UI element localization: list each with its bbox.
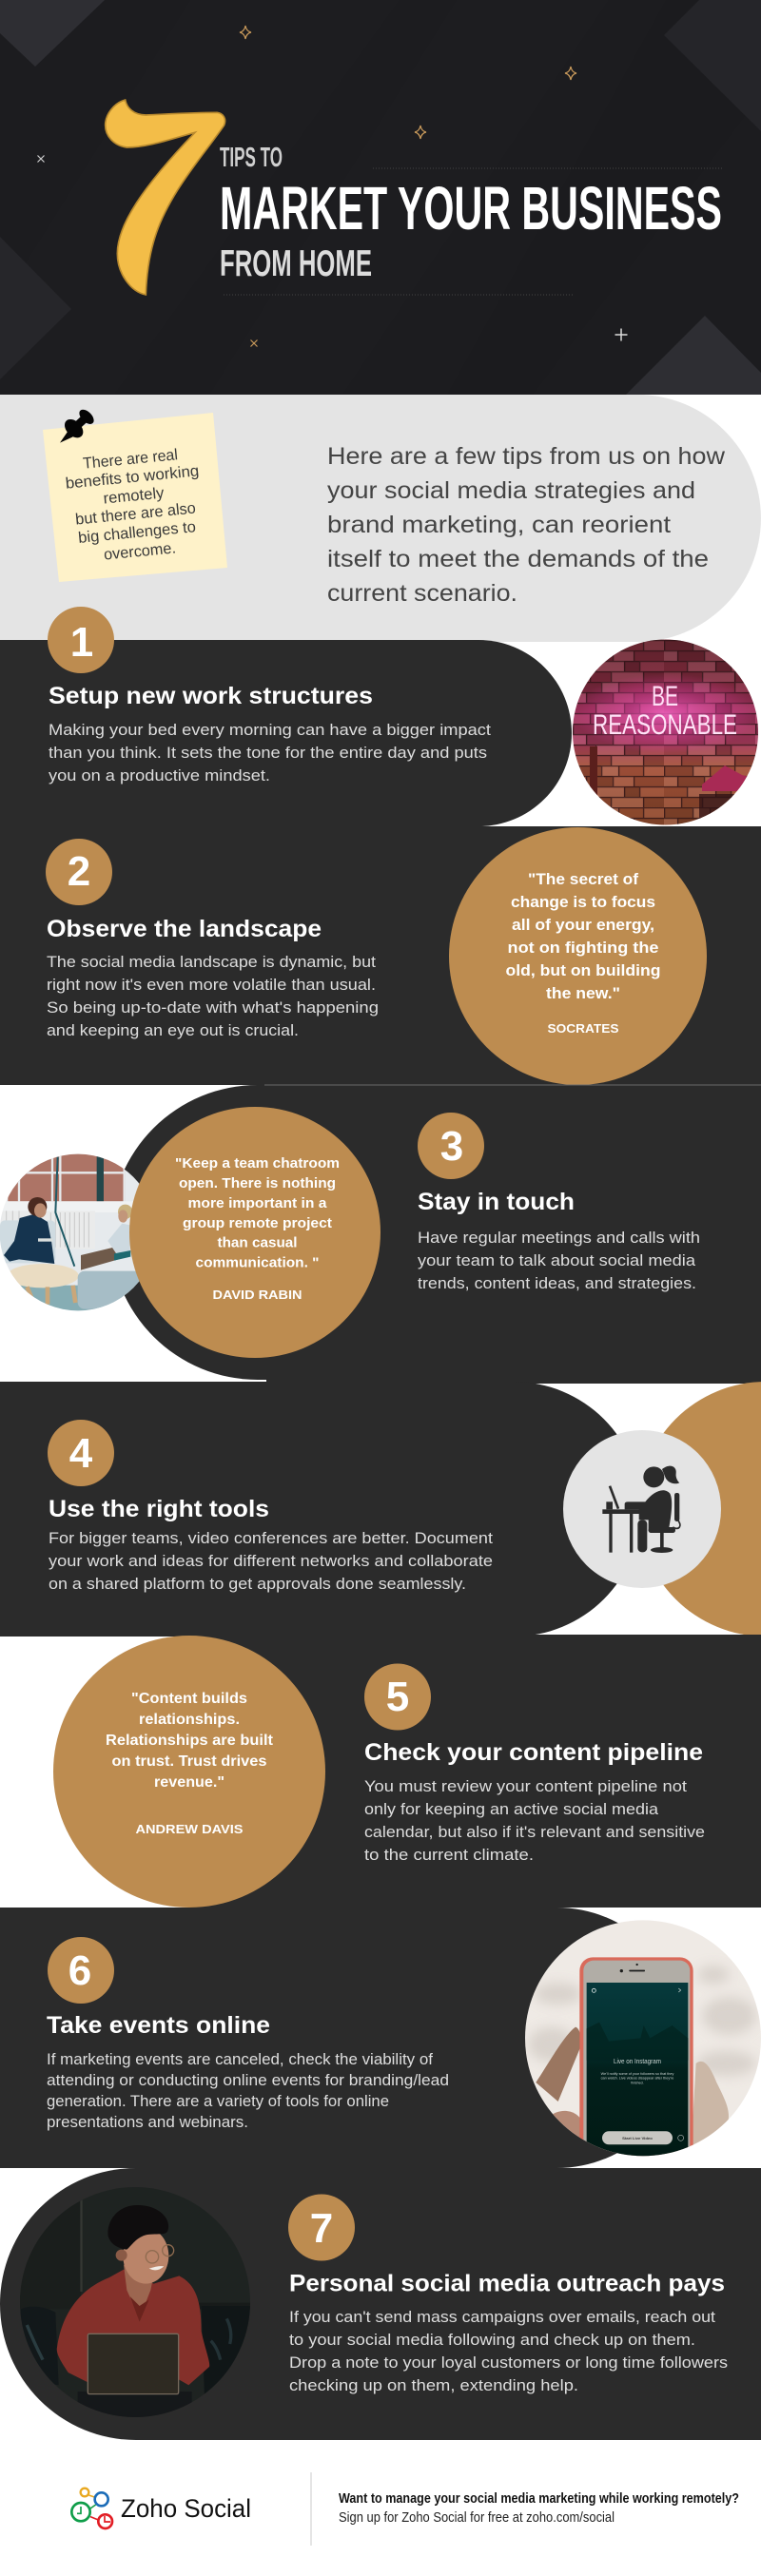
photo: phone with Instagram live screen: can watch. Live videos disappear after they're bbox=[601, 2077, 673, 2081]
intro text: your social media strategies and bbox=[327, 477, 695, 504]
number badge 2: 2 bbox=[68, 848, 90, 895]
logo: Zoho Social bbox=[71, 2489, 251, 2528]
sticky note bbox=[43, 413, 227, 582]
heading: use the right tools: Use the right tools bbox=[49, 1496, 269, 1522]
photo: smiling person with laptop bbox=[14, 2182, 255, 2423]
intro text: current scenario. bbox=[327, 580, 517, 607]
footer bbox=[0, 2440, 761, 2576]
photo: phone with Instagram live screen: finished. bbox=[631, 2082, 644, 2085]
quote circle: Andrew Davis: revenue." bbox=[154, 1774, 224, 1791]
heading: setup new work structures: Setup new work structures bbox=[49, 683, 373, 709]
body text tip 5: to the current climate. bbox=[364, 1847, 534, 1864]
body text tip 4 bbox=[49, 1530, 493, 1593]
intro text: itself to meet the demands of the bbox=[327, 546, 709, 572]
body text tip 2: The social media landscape is dynamic, but bbox=[47, 954, 376, 971]
quote circle: Socrates: change is to focus bbox=[511, 893, 655, 911]
quote circle: David Rabin: than casual bbox=[217, 1234, 297, 1251]
icon: push pin bbox=[60, 407, 96, 443]
quote circle: David Rabin: "Keep a team chatroom bbox=[175, 1155, 340, 1172]
big numeral 7 bbox=[106, 100, 225, 295]
intro text: brand marketing, can reorient bbox=[327, 512, 671, 538]
panel: tip 3 bbox=[0, 1085, 761, 1384]
quote circle: Socrates: SOCRATES bbox=[548, 1021, 619, 1036]
decorative sparkles bbox=[38, 26, 628, 346]
number badge 4: 4 bbox=[69, 1430, 93, 1477]
number badge 3 bbox=[418, 1113, 484, 1179]
quote circle: Andrew Davis: Relationships are built bbox=[106, 1733, 273, 1749]
photo: phone with Instagram live screen: Start Live Video bbox=[622, 2136, 653, 2140]
heading: stay in touch: Stay in touch bbox=[418, 1189, 575, 1215]
icon: person working at desk bbox=[563, 1430, 721, 1588]
photo: phone with Instagram live screen bbox=[523, 1911, 761, 2165]
title: FROM HOME bbox=[220, 243, 372, 284]
quote circle: Socrates: all of your energy, bbox=[512, 916, 654, 934]
number badge 5 bbox=[364, 1664, 431, 1731]
number badge 6 bbox=[48, 1937, 114, 2004]
body text tip 7 bbox=[289, 2309, 728, 2394]
quote circle: David Rabin: open. There is nothing bbox=[179, 1175, 336, 1191]
body text tip 6: attending or conducting online events for branding/lead bbox=[47, 2072, 449, 2089]
body text tip 2: right now it's even more volatile than usual. bbox=[47, 977, 376, 994]
body text tip 5: only for keeping an active social media bbox=[364, 1801, 659, 1818]
photo: team meeting bbox=[0, 1154, 139, 1310]
body text tip 7: Drop a note to your loyal customers or long time followers bbox=[289, 2354, 728, 2372]
sticky note: There are real bbox=[82, 446, 179, 473]
panel: intro bbox=[0, 395, 761, 642]
body text tip 1: than you think. It sets the tone for the entire day and puts bbox=[49, 745, 487, 762]
number badge 5: 5 bbox=[386, 1674, 409, 1720]
sticky note: remotely bbox=[103, 484, 166, 508]
quote circle: Andrew Davis bbox=[53, 1636, 325, 1908]
call to action bbox=[339, 2491, 739, 2526]
body text tip 5 bbox=[364, 1778, 705, 1864]
quote circle: Socrates: not on fighting the bbox=[508, 939, 658, 957]
tan circle accent bbox=[663, 1382, 761, 1635]
panel: tip 2 bbox=[0, 826, 761, 1085]
sticky note: benefits to working bbox=[65, 462, 200, 493]
body text tip 4: on a shared platform to get approvals done seamlessly. bbox=[49, 1576, 466, 1593]
quote circle: Socrates: "The secret of bbox=[528, 870, 638, 888]
body text tip 1: you on a productive mindset. bbox=[49, 767, 270, 784]
panel: tip 6 bbox=[0, 1908, 761, 2168]
heading: personal social media outreach pays: Personal social media outreach pays bbox=[289, 2271, 725, 2297]
body text tip 7: If you can't send mass campaigns over emails, reach out bbox=[289, 2309, 715, 2326]
panel: tip 1 bbox=[0, 607, 761, 827]
body text tip 4: your work and ideas for different networks and collaborate bbox=[49, 1553, 493, 1570]
panel: tip 7 bbox=[0, 2168, 761, 2440]
number badge 1: 1 bbox=[70, 619, 93, 666]
title bbox=[220, 143, 722, 295]
body text tip 3: your team to talk about social media bbox=[418, 1252, 696, 1269]
quote circle: Socrates bbox=[449, 827, 707, 1085]
body text tip 5: calendar, but also if it's relevant and sensitive bbox=[364, 1824, 705, 1841]
heading: observe the landscape: Observe the landscape bbox=[47, 916, 322, 942]
quote circle: Andrew Davis: on trust. Trust drives bbox=[112, 1753, 266, 1770]
intro text bbox=[327, 443, 726, 607]
call to action: Sign up for Zoho Social for free at zoho.com/social bbox=[339, 2510, 615, 2526]
body text tip 7: checking up on them, extending help. bbox=[289, 2377, 578, 2394]
heading: take events online: Take events online bbox=[47, 2012, 270, 2039]
panel: tip 4 bbox=[0, 1382, 761, 1637]
body text tip 4: For bigger teams, video conferences are better. Document bbox=[49, 1530, 493, 1547]
logo: Zoho Social: Zoho Social bbox=[121, 2494, 251, 2523]
header banner bbox=[0, 0, 761, 395]
quote circle: Socrates: the new." bbox=[546, 984, 620, 1002]
body text tip 7: to your social media following and check up on them. bbox=[289, 2332, 695, 2349]
body text tip 6: generation. There are a variety of tools for online bbox=[47, 2093, 389, 2110]
sticky note: overcome. bbox=[103, 539, 177, 564]
body text tip 2: So being up-to-date with what's happening bbox=[47, 999, 379, 1017]
sticky note: but there are also bbox=[74, 499, 197, 529]
quote circle: Andrew Davis: "Content builds bbox=[131, 1691, 247, 1707]
number badge 7 bbox=[288, 2195, 355, 2261]
heading: check your content pipeline: Check your content pipeline bbox=[364, 1739, 703, 1766]
quote circle: Andrew Davis: ANDREW DAVIS bbox=[135, 1822, 244, 1836]
number badge 6: 6 bbox=[68, 1947, 91, 1994]
body text tip 3: Have regular meetings and calls with bbox=[418, 1230, 700, 1247]
photo: neon sign on brick wall bbox=[571, 637, 761, 827]
quote circle: Socrates: old, but on building bbox=[506, 961, 660, 979]
photo: neon sign on brick wall: BE bbox=[652, 681, 678, 712]
body text tip 6: presentations and webinars. bbox=[47, 2114, 248, 2131]
body text tip 1: Making your bed every morning can have a bigger impact bbox=[49, 722, 491, 739]
body text tip 2: and keeping an eye out is crucial. bbox=[47, 1022, 299, 1039]
body text tip 1 bbox=[49, 722, 491, 784]
photo: phone with Instagram live screen: Live on Instagram bbox=[614, 2059, 661, 2065]
number badge 7: 7 bbox=[310, 2205, 333, 2252]
quote circle: David Rabin bbox=[129, 1107, 380, 1358]
body text tip 3 bbox=[418, 1230, 700, 1292]
number badge 3: 3 bbox=[440, 1123, 463, 1170]
number badge 4 bbox=[48, 1420, 114, 1486]
sticky note: big challenges to bbox=[77, 518, 197, 547]
body text tip 6: If marketing events are canceled, check the viability of bbox=[47, 2051, 433, 2068]
quote circle: Andrew Davis: relationships. bbox=[139, 1712, 240, 1728]
body text tip 2 bbox=[47, 954, 379, 1039]
body text tip 6 bbox=[47, 2051, 449, 2131]
number badge 1 bbox=[48, 607, 114, 673]
panel: tip 5 bbox=[53, 1635, 761, 1908]
quote circle: David Rabin: DAVID RABIN bbox=[213, 1288, 302, 1302]
body text tip 3: trends, content ideas, and strategies. bbox=[418, 1275, 696, 1292]
quote circle: David Rabin: group remote project bbox=[183, 1215, 332, 1231]
body text tip 5: You must review your content pipeline not bbox=[364, 1778, 687, 1795]
quote circle: David Rabin: communication. " bbox=[196, 1255, 320, 1270]
photo: phone with Instagram live screen: We'll notify some of your followers so that they bbox=[601, 2072, 674, 2076]
number badge 2 bbox=[46, 839, 112, 905]
title: TIPS TO bbox=[220, 143, 283, 173]
intro text: Here are a few tips from us on how bbox=[327, 443, 726, 470]
quote circle: David Rabin: more important in a bbox=[188, 1195, 327, 1211]
